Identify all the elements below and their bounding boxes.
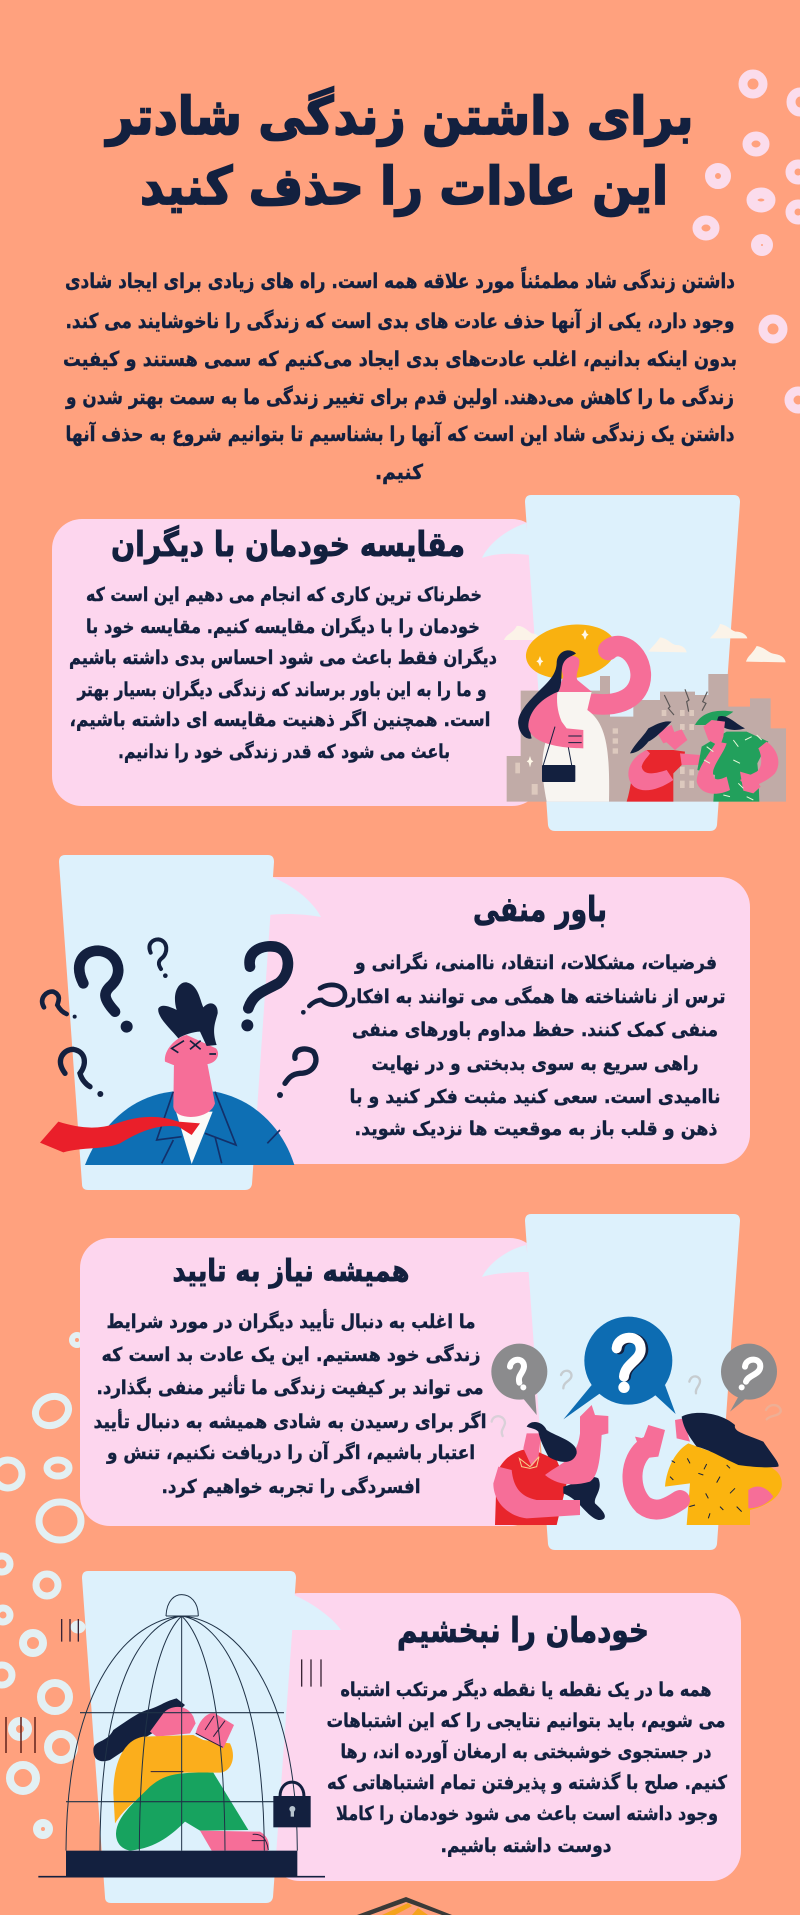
woman figure [93, 1698, 269, 1851]
body text: همه ما در یک نقطه یا نقطه دیگر مرتکب اشتباه [340, 1678, 712, 1701]
body text: اگر برای رسیدن به شادی همیشه به دنبال تأیید [94, 1409, 486, 1433]
body text: می شویم، باید بتوانیم نتایجی را که این اشتباهات [326, 1710, 726, 1732]
intro paragraph [63, 266, 737, 484]
woman arm [528, 692, 583, 748]
woman head and neck [557, 656, 592, 692]
body text: ترس از ناشناخته ها همگی می توانند به افکار [346, 985, 726, 1008]
cage [66, 1595, 297, 1851]
tick marks [62, 1619, 321, 1687]
body text: است. همچنین اگر ذهنیت مقایسه ای داشته باشیم، [70, 708, 490, 731]
body text: دوست داشته باشیم. [440, 1835, 612, 1857]
title: برای داشتن زندگی شادتر [104, 86, 693, 147]
card background [240, 877, 750, 1164]
neck [173, 1060, 215, 1117]
body text: خطرناک ترین کاری که انجام می دهیم این است که [86, 584, 482, 606]
body text: خودمان را با دیگران مقایسه کنیم. مقایسه خود با [86, 615, 480, 638]
body text: دیگران فقط باعث می شود احساس بدی داشته باشیم [69, 646, 497, 669]
body text: اعتبار باشیم، اگر آن را دریافت نکنیم، تنش و [106, 1440, 475, 1464]
body text: زندگی خود هستیم. این یک عادت بد است که [102, 1343, 480, 1366]
body text [94, 1309, 486, 1498]
woman arm loop [595, 646, 641, 704]
card background [270, 1593, 741, 1881]
gray bubble right [721, 1344, 777, 1412]
card background [80, 1238, 540, 1526]
body text: منفی کمک کنند. حفظ مداوم باورهای منفی [352, 1019, 718, 1041]
body text: ناامیدی است. سعی کنید مثبت فکر کنید و با [350, 1086, 720, 1108]
illustration: confused man and question marks [40, 939, 345, 1165]
tick marks left [6, 1717, 35, 1753]
body text: ذهن و قلب باز به موقعیت ها نزدیک شوید. [354, 1118, 718, 1140]
illustration: woman in cage [38, 1595, 325, 1877]
heading: مقایسه خودمان با دیگران [111, 525, 465, 565]
heading: همیشه نیاز به تایید [172, 1254, 410, 1289]
body text [346, 951, 726, 1140]
title: این عادات را حذف کنید [140, 157, 668, 217]
body text: کنیم. صلح با گذشته و پذیرفتن تمام اشتباهاتی که [327, 1771, 728, 1794]
left woman [493, 1405, 608, 1525]
speech panel [59, 855, 321, 1190]
body text: می تواند بر کیفیت زندگی ما تأثیر منفی بگذارد. [96, 1375, 484, 1399]
heading: خودمان را نبخشیم [397, 1611, 649, 1651]
padlock [273, 1782, 311, 1827]
gray bubble left [491, 1344, 547, 1415]
body text [326, 1678, 728, 1857]
blue bubble [563, 1317, 676, 1419]
speech panel [82, 1571, 341, 1903]
shirt [176, 1112, 213, 1164]
panel: comparing ourselves with others [52, 495, 786, 831]
panel: not forgiving ourselves [38, 1571, 741, 1903]
hair [158, 982, 218, 1046]
card background [52, 519, 542, 806]
lightning [664, 689, 707, 715]
faint question marks [492, 1371, 781, 1436]
body text: فرضیات، مشکلات، انتقاد، ناامنی، نگرانی و [354, 951, 717, 974]
woman hair [518, 650, 576, 739]
title [104, 86, 693, 217]
woman in red [627, 750, 685, 802]
head [165, 1035, 218, 1065]
body text [69, 584, 497, 763]
speech panel [482, 1214, 740, 1550]
illustration: women and city [504, 619, 786, 802]
body text: باعث می شود که قدر زندگی خود را ندانیم. [118, 740, 450, 763]
heading: باور منفی [473, 890, 607, 930]
body text: وجود داشته است باعث می شود خودمان را کاملا [336, 1803, 718, 1825]
yellow halo [522, 619, 620, 684]
woman dress [542, 692, 609, 802]
panel: negative belief [40, 855, 750, 1190]
clouds [504, 624, 786, 662]
buildings [507, 674, 786, 802]
sparkle [527, 756, 533, 767]
panel: always seeking approval [80, 1214, 782, 1550]
body text: ما اغلب به دنبال تأیید دیگران در مورد شرایط [106, 1309, 476, 1333]
body text: و ما را به این باور برساند که زندگی دیگران بسیار بهتر [77, 678, 486, 701]
question marks [42, 939, 345, 1087]
cage base [66, 1851, 297, 1877]
right woman [632, 1413, 782, 1525]
lapels [157, 1092, 280, 1163]
logo [357, 1897, 452, 1915]
body text: در جستجوی خوشبختی به ارمغان آورده اند، رها [340, 1739, 712, 1763]
intro paragraph: کنیم. [375, 460, 423, 484]
woman in green [697, 732, 768, 802]
speech panel [482, 495, 740, 831]
face marks [172, 1041, 216, 1054]
body text: افسردگی را تجربه خواهیم کرد. [162, 1475, 420, 1498]
tie [40, 1117, 200, 1152]
jacket [85, 1092, 294, 1165]
decorative blue rings left [0, 1335, 82, 1835]
body text: راهی سریع به سوی بدبختی و در نهایت [372, 1053, 698, 1075]
illustration: two women with question bubbles [491, 1317, 782, 1525]
decorative pink rings top right [697, 74, 800, 409]
bag [543, 727, 572, 765]
